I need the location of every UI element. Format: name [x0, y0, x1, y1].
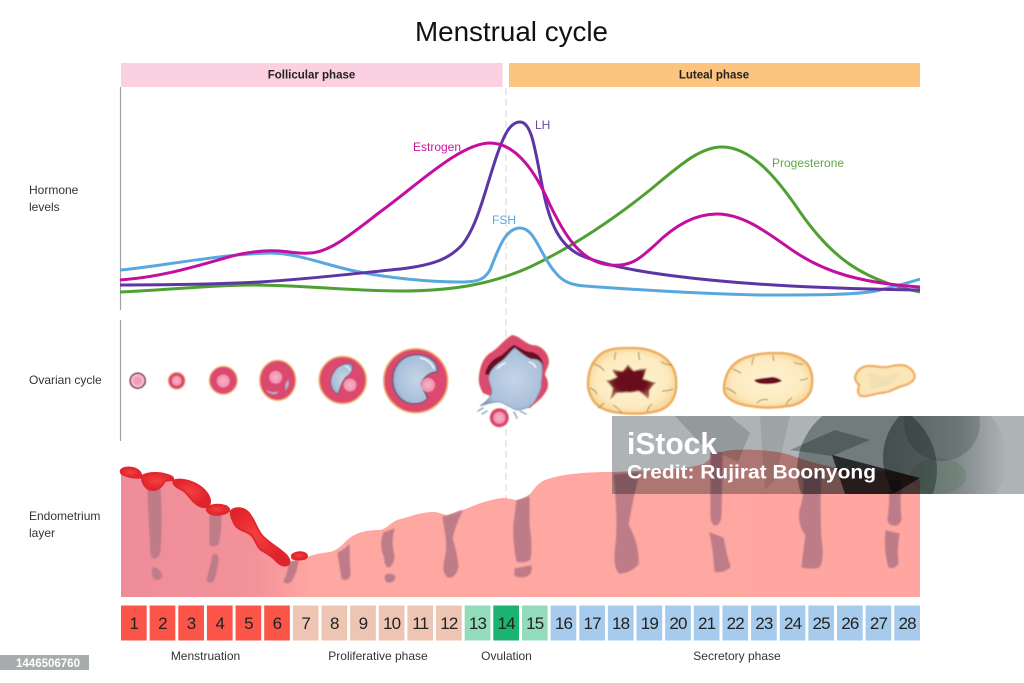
day number strip: 3	[187, 614, 196, 633]
day number strip: 10	[383, 614, 401, 633]
day number strip: 6	[273, 614, 282, 633]
day number strip: 4	[215, 614, 224, 633]
day number strip: 20	[669, 614, 687, 633]
row label: hormone levels: levels	[29, 200, 60, 214]
hormone line chart	[120, 122, 920, 295]
title: Menstrual cycle	[415, 16, 608, 47]
iStock logo text: iStock	[627, 426, 718, 461]
day number strip: 5	[244, 614, 253, 633]
follicle 1	[130, 373, 145, 388]
day number strip: 21	[698, 614, 716, 633]
label: Progesterone: Progesterone	[772, 156, 844, 170]
day number strip: 26	[841, 614, 859, 633]
menstrual blood clots	[121, 467, 307, 566]
label: Estrogen: Estrogen	[413, 140, 461, 154]
ovarian cycle row	[130, 335, 915, 427]
corpus albicans small	[855, 365, 915, 396]
day number strip: 27	[870, 614, 887, 633]
day number strip: 24	[784, 614, 802, 633]
day number strip: 2	[158, 614, 167, 633]
phase header: follicular	[121, 63, 502, 87]
day number strip: 13	[469, 614, 486, 633]
phase label: ovulation: Ovulation	[481, 649, 532, 663]
stock id badge: 1446506760	[16, 658, 80, 670]
day number strip: 22	[727, 614, 744, 633]
day number strip: 17	[583, 614, 601, 633]
phase header: luteal: Luteal phase	[679, 70, 749, 82]
day number strip: 16	[555, 614, 572, 633]
day number strip: 28	[898, 614, 916, 633]
ruptured follicle at ovulation	[478, 335, 549, 427]
day number strip: 15	[526, 614, 544, 633]
day number strip: 19	[641, 614, 658, 633]
corpus luteum large	[588, 348, 676, 414]
curve: progesterone	[120, 147, 920, 292]
corpus luteum medium	[724, 353, 812, 408]
day number strip: 14	[498, 614, 515, 633]
follicle 4	[260, 360, 296, 400]
credit line: Credit: Rujirat Boonyong	[627, 462, 876, 484]
label: FSH: FSH	[492, 213, 516, 227]
phase header: luteal	[509, 63, 920, 87]
phase label: menstruation: Menstruation	[171, 649, 240, 663]
label: LH: LH	[535, 118, 550, 132]
day number strip	[121, 606, 920, 640]
day number strip: 9	[359, 614, 368, 633]
uterine glands	[148, 453, 901, 583]
follicle 5	[319, 356, 366, 404]
endometrium layer	[121, 450, 920, 597]
day number strip: 12	[440, 614, 458, 633]
follicle 6	[384, 349, 448, 413]
stock id badge	[0, 655, 89, 670]
phase label: secretory phase: Secretory phase	[693, 649, 781, 663]
row label: hormone levels: Hormone	[29, 183, 79, 197]
day number strip: 18	[612, 614, 630, 633]
row label: endometrium layer: layer	[29, 526, 55, 540]
day number strip: 8	[330, 614, 339, 633]
endometrium tissue	[121, 450, 920, 597]
curve: FSH	[120, 228, 920, 295]
curve: estrogen	[120, 143, 920, 287]
follicle 2	[168, 372, 185, 389]
day number strip: 25	[813, 614, 830, 633]
phase header: follicular: Follicular phase	[268, 70, 355, 82]
row label: ovarian cycle: Ovarian cycle	[29, 373, 102, 387]
day number strip: 23	[755, 614, 773, 633]
curve: LH	[120, 122, 920, 290]
follicle 3	[209, 366, 237, 394]
row label: endometrium layer: Endometrium	[29, 509, 100, 523]
watermark banner	[612, 416, 1024, 494]
day number strip: 11	[412, 614, 429, 633]
phase label: proliferative phase: Proliferative phase	[328, 649, 428, 663]
day number strip: 1	[130, 614, 139, 633]
day number strip: 7	[301, 614, 310, 633]
